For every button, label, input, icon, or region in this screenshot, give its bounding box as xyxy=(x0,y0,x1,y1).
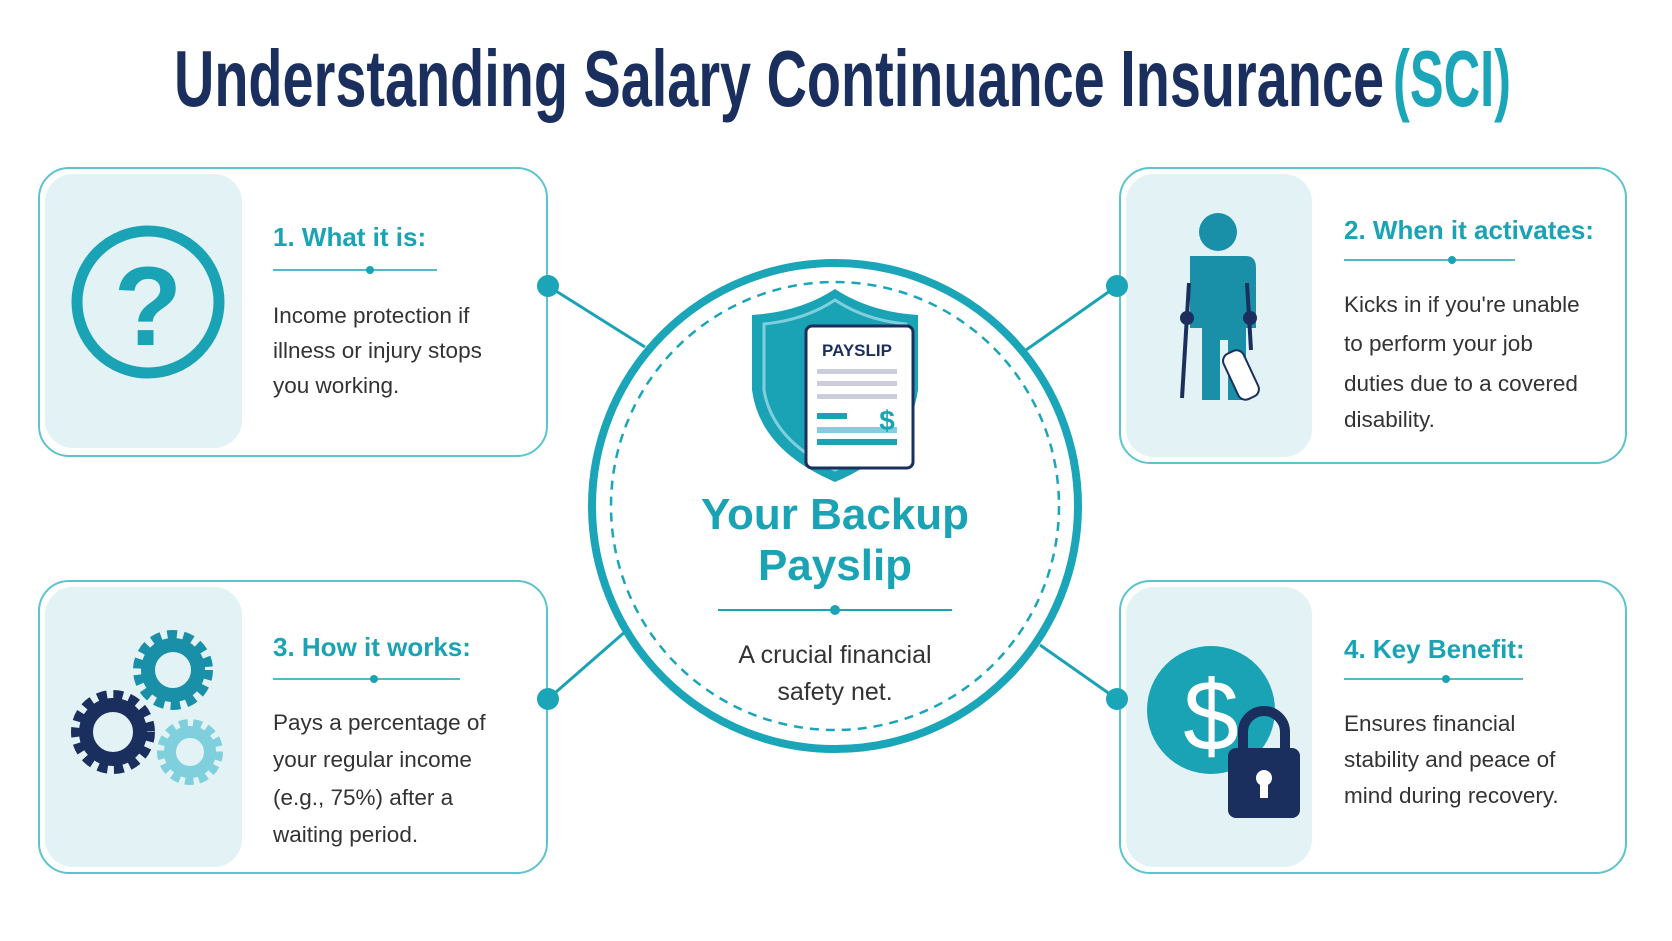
text: when it activates xyxy=(1344,292,1580,432)
icon: gears xyxy=(78,637,217,779)
text: key benefit: Ensures financial xyxy=(1344,711,1515,736)
text: key benefit: stability and peace of xyxy=(1344,747,1556,772)
text: key benefit xyxy=(1344,711,1559,808)
center circle xyxy=(592,263,1078,749)
icon: question mark: ? xyxy=(114,244,182,369)
text: when it activates: disability. xyxy=(1344,407,1435,432)
icon: dollar and lock xyxy=(1147,646,1300,818)
text: how it works: waiting period. xyxy=(272,822,418,847)
panel: key benefit xyxy=(1120,581,1626,873)
text: what it is xyxy=(273,303,482,398)
icon: shield with payslip: $ xyxy=(879,405,895,436)
connector lines xyxy=(548,286,1117,699)
panel: when it activates xyxy=(1120,168,1626,463)
text: key benefit: mind during recovery. xyxy=(1344,783,1559,808)
center heading: Your Backup xyxy=(701,490,969,539)
text: when it activates: to perform your job xyxy=(1344,331,1533,356)
center subtitle: A crucial financial xyxy=(738,641,932,669)
text: how it works: your regular income xyxy=(273,747,472,772)
icon: shield with payslip: PAYSLIP xyxy=(822,341,892,360)
connector dots xyxy=(537,275,1128,710)
icon: dollar and lock: $ xyxy=(1183,660,1239,772)
center subtitle: safety net. xyxy=(777,678,893,706)
heading: how it works: 3. How it works: xyxy=(273,632,471,662)
text: what it is: you working. xyxy=(273,373,399,398)
text: how it works: (e.g., 75%) after a xyxy=(273,785,454,810)
icon: person on crutches xyxy=(1180,213,1262,402)
title: (SCI) xyxy=(1393,34,1511,123)
center heading xyxy=(701,490,969,590)
icon: shield with payslip xyxy=(752,289,918,482)
text: how it works: Pays a percentage of xyxy=(273,710,486,735)
panel: what it is xyxy=(39,168,547,456)
text: what it is: illness or injury stops xyxy=(273,338,482,363)
text: when it activates: duties due to a covered xyxy=(1344,371,1578,396)
icon: question mark xyxy=(77,231,219,373)
text: when it activates: Kicks in if you're unable xyxy=(1344,292,1580,317)
center heading: Payslip xyxy=(758,541,912,590)
center subtitle xyxy=(738,641,932,706)
heading: what it is: 1. What it is: xyxy=(273,222,426,252)
panel: how it works xyxy=(39,581,547,873)
text: how it works xyxy=(272,710,486,847)
text: what it is: Income protection if xyxy=(273,303,470,328)
heading: key benefit: 4. Key Benefit: xyxy=(1344,634,1525,664)
heading: when it activates: 2. When it activates: xyxy=(1344,215,1594,245)
